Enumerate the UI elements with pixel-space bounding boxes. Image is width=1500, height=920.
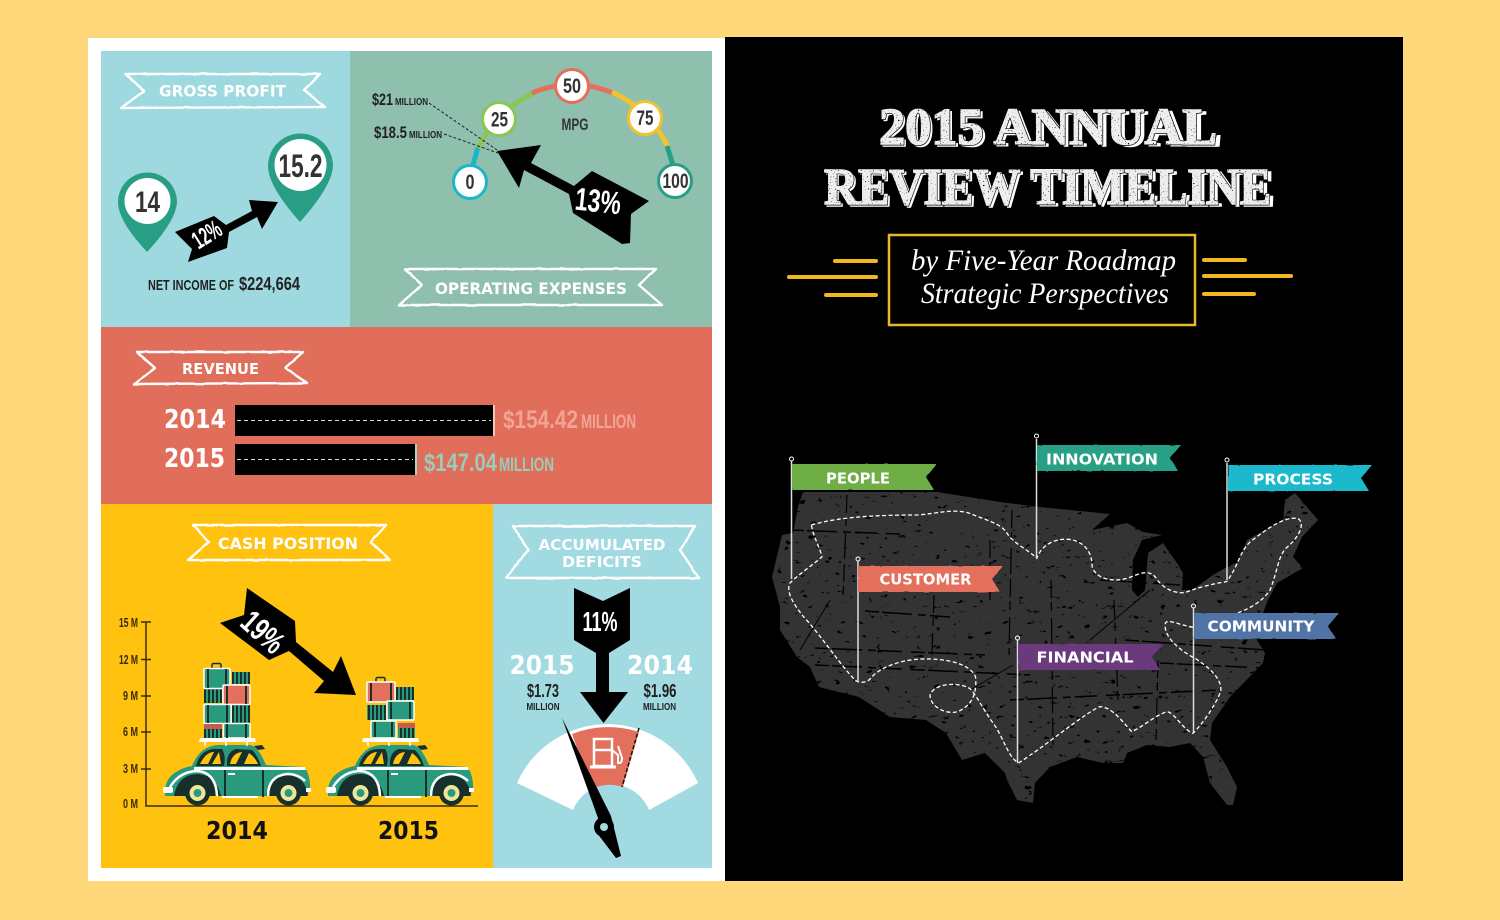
arrow: 12% increase: 12% — [187, 215, 227, 255]
icon: car 2014 — [163, 738, 311, 806]
dial: 100: 100 — [662, 170, 688, 193]
label: $21 million: $21 — [372, 90, 393, 109]
net income text: $224,664 — [239, 274, 300, 294]
chart axis — [119, 615, 478, 811]
net income text: NET INCOME OF — [148, 277, 234, 294]
decorative dashes: right — [1204, 260, 1291, 294]
bar: 2014: 2014 — [164, 405, 226, 435]
dashed route — [789, 511, 1301, 763]
ribbon: operating expenses: OPERATING EXPENSES — [435, 279, 627, 298]
title: REVIEW TIMELINE — [824, 159, 1271, 216]
arrow: 19% decrease — [220, 588, 356, 695]
chart axis: 12 M — [119, 652, 138, 667]
flag: financial: FINANCIAL — [1036, 648, 1134, 666]
flag: community: COMMUNITY — [1208, 618, 1316, 636]
icon: luggage stack 2015 — [367, 678, 415, 738]
panel: revenue — [101, 327, 712, 504]
ribbon: operating expenses — [399, 269, 662, 305]
value: 2014 $1.96 million: $1.96 — [644, 681, 676, 701]
ribbon: cash position: CASH POSITION — [218, 534, 358, 553]
value: 2015 $1.73 million: 2015 — [510, 651, 574, 681]
map pin: 14: 14 — [135, 186, 160, 219]
icon: car 2015 — [326, 738, 474, 806]
title: 2015 ANNUAL — [879, 99, 1217, 156]
value: 2014 $1.96 million — [627, 651, 693, 713]
panel: accumulated deficits — [493, 504, 712, 868]
label: $18.5 million: $18.5 — [374, 123, 407, 142]
value: 2015 $1.73 million — [510, 651, 574, 713]
ribbon: revenue: REVENUE — [182, 360, 259, 378]
panel: gross profit — [101, 51, 350, 327]
black right panel — [725, 37, 1403, 881]
title: 2015 ANNUAL — [879, 99, 1217, 156]
decorative dashes: left — [789, 261, 876, 295]
label: $18.5 million — [374, 123, 498, 153]
chart axis: 6 M — [123, 724, 138, 739]
dial: 0 — [454, 166, 486, 198]
title: REVIEW TIMELINE — [826, 161, 1275, 218]
flag: financial — [1016, 636, 1163, 763]
subtitle box — [889, 235, 1195, 325]
flag: people: PEOPLE — [826, 470, 890, 488]
white card frame — [88, 38, 725, 881]
value: 2015 $1.73 million: MILLION — [526, 702, 560, 713]
dial: 50 — [556, 70, 588, 102]
net income text — [148, 274, 300, 294]
panel: operating expenses — [350, 51, 712, 327]
arrow: 13% decrease — [497, 145, 649, 244]
flag: customer: CUSTOMER — [880, 570, 972, 588]
US map with route — [760, 485, 1330, 815]
label: $18.5 million: MILLION — [409, 130, 442, 141]
arrow: 11% decrease: 11% — [582, 606, 618, 637]
bar: 2015 — [164, 444, 554, 477]
bar: 2015: 2015 — [164, 444, 225, 474]
bar: 2014 — [164, 405, 636, 436]
dial: 75 — [628, 102, 662, 134]
chart axis: 9 M — [123, 688, 138, 703]
map pin: 14 — [118, 172, 177, 252]
ribbon: revenue — [134, 352, 307, 384]
dial: 100 — [658, 164, 692, 198]
chart axis: 0 M — [123, 796, 138, 811]
gauge fan — [517, 724, 698, 810]
subtitle box: by Five-Year Roadmap — [911, 244, 1176, 277]
chart axis: 3 M — [123, 761, 138, 776]
subtitle box: Strategic Perspectives — [921, 277, 1169, 310]
flag: process: PROCESS — [1253, 470, 1333, 488]
value: 2014 $1.96 million: 2014 — [627, 651, 693, 681]
ribbon: accumulated deficits: DEFICITS — [562, 553, 642, 571]
arrow: 12% increase — [175, 200, 278, 262]
gauge label: MPG: MPG — [562, 115, 588, 134]
arrow: 19% decrease: 19% — [234, 603, 292, 661]
flag: process — [1225, 458, 1372, 580]
dial: 25 — [482, 102, 516, 136]
bar: 2014: MILLION — [581, 412, 636, 433]
map pin: 15.2 — [268, 134, 333, 222]
map pin: 15.2: 15.2 — [278, 148, 322, 184]
ring gauge: MPG — [454, 70, 692, 198]
flag: customer — [856, 557, 1003, 682]
title: 2015 ANNUAL — [881, 101, 1222, 158]
value: 2015 $1.73 million: $1.73 — [527, 681, 559, 701]
arrow: 11% decrease — [574, 588, 630, 723]
flag: people — [790, 457, 937, 579]
icon: fuel pump — [590, 739, 622, 767]
dial: 0: 0 — [466, 171, 474, 194]
chart axis: 15 M — [119, 615, 138, 630]
dial: 50: 50 — [563, 75, 581, 98]
dial: 25: 25 — [491, 108, 508, 132]
panel: cash position — [101, 504, 493, 868]
year label: 2015: 2015 — [378, 816, 439, 845]
flag: community — [1192, 604, 1339, 732]
label: $21 million: MILLION — [395, 97, 428, 108]
ribbon: accumulated deficits — [506, 526, 699, 578]
flag: innovation — [1034, 434, 1181, 558]
bar: 2015: MILLION — [499, 455, 554, 476]
arrow: 13% decrease: 13% — [573, 181, 623, 221]
year label: 2014: 2014 — [206, 816, 268, 845]
flag: innovation: INNOVATION — [1046, 450, 1158, 468]
ribbon: cash position — [188, 525, 390, 560]
icon: luggage stack 2014 — [204, 664, 250, 738]
ribbon: gross profit: GROSS PROFIT — [159, 82, 286, 100]
bar: 2014: $154.42 — [503, 406, 578, 434]
title: REVIEW TIMELINE — [824, 159, 1271, 216]
dial: 75: 75 — [636, 107, 654, 130]
bar: 2015: $147.04 — [424, 449, 497, 477]
title — [824, 99, 1275, 218]
gauge needle — [562, 718, 621, 858]
ribbon: gross profit — [121, 74, 325, 108]
value: 2014 $1.96 million: MILLION — [643, 702, 676, 713]
label: $21 million — [372, 90, 497, 150]
ribbon: accumulated deficits: ACCUMULATED — [538, 536, 666, 554]
